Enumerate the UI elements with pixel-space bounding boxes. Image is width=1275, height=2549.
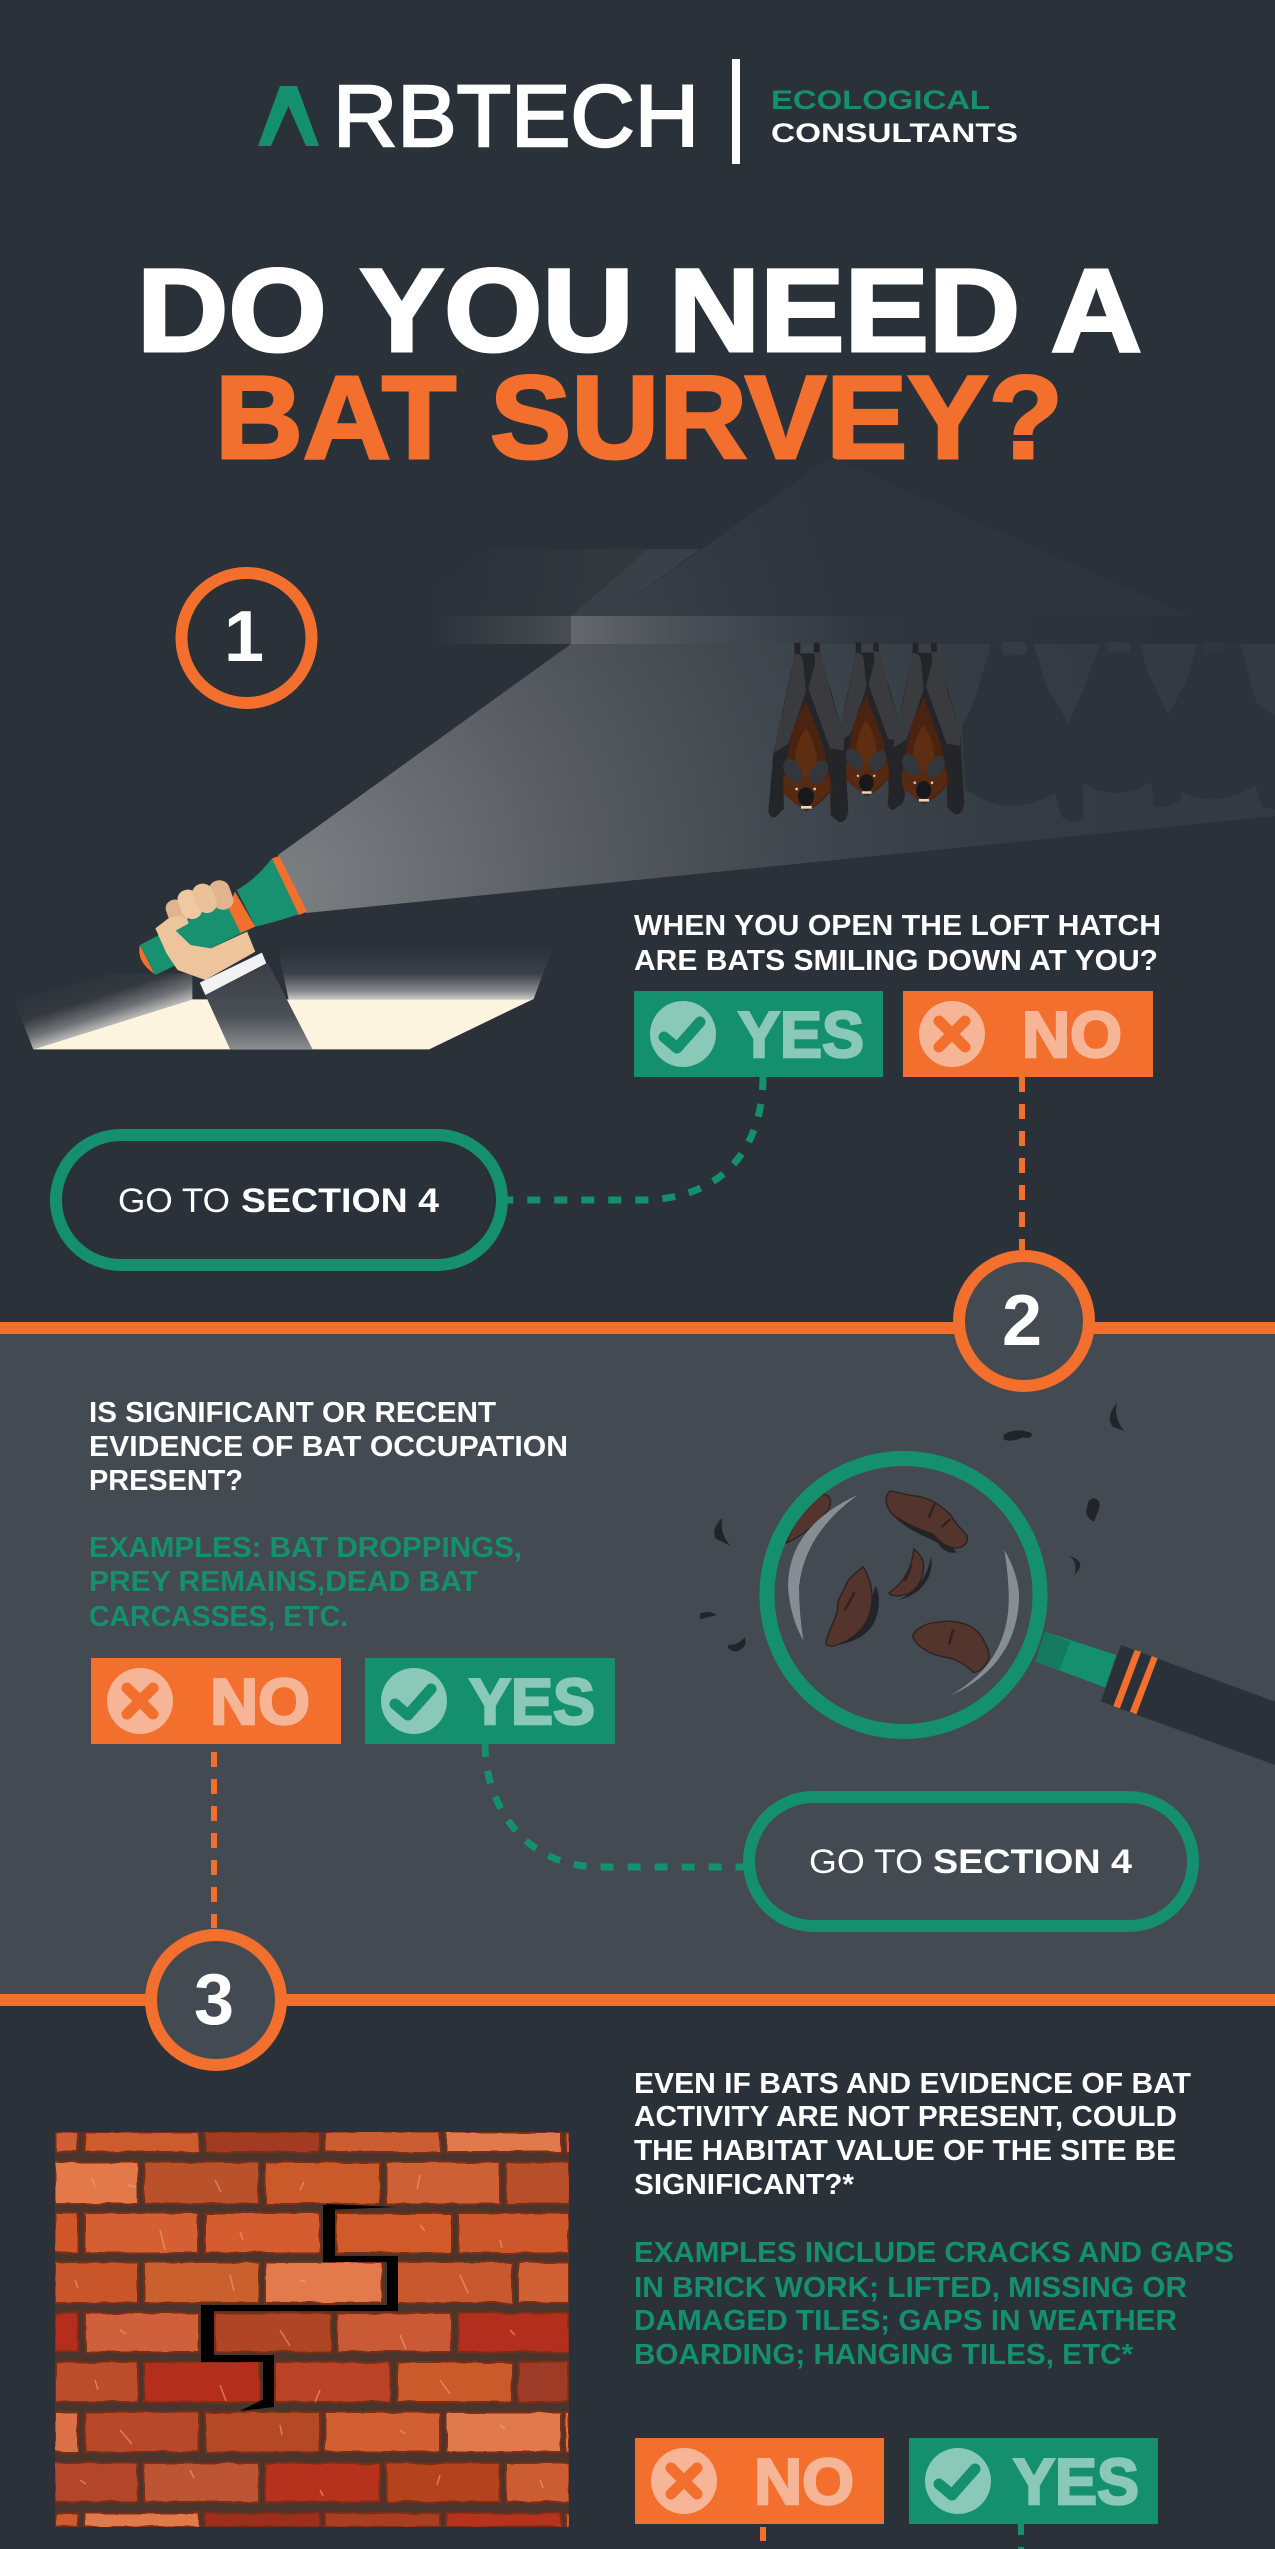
callout: go to section 4 (second) bbox=[749, 1797, 1193, 1926]
callout: go to section 4 (first) bbox=[56, 1135, 502, 1265]
ceiling band left bbox=[428, 616, 571, 644]
button: no (section 1) bbox=[903, 991, 1153, 1077]
step number 1 bbox=[182, 573, 312, 703]
cuff bbox=[200, 953, 266, 995]
orange divider 1 bbox=[0, 1322, 1275, 1334]
callout: go to section 4 (second): SECTION 4 bbox=[933, 1843, 1132, 1881]
examples text section 2: CARCASSES, ETC. bbox=[89, 1601, 348, 1633]
button: yes (section 2): YES bbox=[469, 1665, 595, 1738]
step number 2: 2 bbox=[1002, 1281, 1042, 1361]
question 3: SIGNIFICANT?* bbox=[634, 2169, 855, 2201]
logo tagline: ecological: ECOLOGICAL bbox=[771, 85, 990, 115]
examples text section 2: PREY REMAINS,DEAD BAT bbox=[89, 1566, 478, 1598]
callout: go to section 4 (first): GO TO bbox=[118, 1182, 230, 1220]
flashlight end cap bbox=[139, 945, 155, 974]
scattered droppings bbox=[700, 1403, 1124, 1652]
arrow stub: yes bbox=[1018, 2524, 1024, 2549]
button: yes (section 1): YES bbox=[738, 998, 864, 1071]
callout: go to section 4 (second): GO TO bbox=[809, 1843, 923, 1881]
bat: right bbox=[888, 643, 964, 814]
lens glare left bbox=[788, 1495, 858, 1641]
examples text section 3 bbox=[634, 2237, 1234, 2371]
roof triangle bbox=[608, 457, 1190, 616]
arrow: yes to section 4 bbox=[485, 1744, 745, 1867]
logo tagline: consultants: CONSULTANTS bbox=[771, 118, 1018, 148]
bricks bbox=[55, 2132, 569, 2527]
examples text section 3: DAMAGED TILES; GAPS IN WEATHER bbox=[634, 2305, 1177, 2337]
fingers bbox=[163, 878, 236, 928]
flashlight collar bbox=[229, 892, 255, 933]
callout: go to section 4 (first): SECTION 4 bbox=[241, 1182, 439, 1220]
examples text section 3: IN BRICK WORK; LIFTED, MISSING OR bbox=[634, 2272, 1187, 2304]
torch light beam bbox=[278, 644, 1275, 913]
bat shadows bbox=[962, 642, 1275, 822]
button: yes (section 3): YES bbox=[1013, 2445, 1139, 2518]
question 2 bbox=[89, 1397, 568, 1497]
title line 1: DO YOU NEED A bbox=[137, 245, 1142, 377]
logo: Arbtech Ecological Consultants bbox=[258, 59, 1018, 165]
orange divider 2 bbox=[0, 1994, 1275, 2006]
logo wordmark: RBTECH bbox=[333, 68, 699, 165]
arrow: no to step 3 bbox=[211, 1752, 217, 1928]
button: no (section 3) bbox=[635, 2438, 884, 2524]
sleeve bbox=[205, 963, 313, 1049]
question 3 bbox=[634, 2068, 1191, 2201]
hatch left glow bbox=[14, 973, 192, 1049]
brick flecks bbox=[75, 2175, 543, 2496]
illustration: cracked brick wall bbox=[55, 2132, 569, 2527]
bats hanging from the ceiling bbox=[768, 643, 964, 822]
flashlight barrel bbox=[140, 897, 252, 975]
examples text section 2: EXAMPLES: BAT DROPPINGS, bbox=[89, 1532, 522, 1564]
button: yes (section 3) bbox=[909, 2438, 1158, 2524]
ceiling band right bbox=[571, 616, 1171, 644]
button: no (section 2): NO bbox=[210, 1665, 310, 1738]
loft interior: roof and ceiling beam bbox=[390, 457, 1190, 644]
panel: section 2 background bbox=[0, 1328, 1275, 2000]
question 2: IS SIGNIFICANT OR RECENT bbox=[89, 1397, 496, 1429]
title line 2: BAT SURVEY? bbox=[215, 352, 1063, 484]
roof light strip bbox=[571, 549, 700, 616]
flashlight lens ring bbox=[272, 856, 307, 915]
handle connector bbox=[1036, 1632, 1116, 1687]
lens glare right bbox=[949, 1550, 1019, 1696]
button: yes (section 1) bbox=[634, 991, 883, 1077]
step number 2 bbox=[959, 1256, 1089, 1386]
examples text section 3: EXAMPLES INCLUDE CRACKS AND GAPS bbox=[634, 2237, 1234, 2269]
hatch opening bbox=[33, 999, 533, 1049]
logo divider bbox=[732, 59, 740, 164]
question 3: EVEN IF BATS AND EVIDENCE OF BAT bbox=[634, 2068, 1191, 2100]
handle bbox=[1101, 1645, 1275, 1765]
question 3: ACTIVITY ARE NOT PRESENT, COULD bbox=[634, 2101, 1177, 2133]
question 3: THE HABITAT VALUE OF THE SITE BE bbox=[634, 2135, 1176, 2167]
illustration: magnifying glass over droppings bbox=[700, 1403, 1275, 1765]
flashlight head bbox=[237, 858, 306, 927]
roof dim left face bbox=[390, 549, 648, 616]
question 1: ARE BATS SMILING DOWN AT YOU? bbox=[634, 945, 1158, 977]
hand bbox=[155, 916, 255, 980]
button: yes (section 2) bbox=[365, 1658, 615, 1744]
question 1: WHEN YOU OPEN THE LOFT HATCH bbox=[634, 910, 1161, 942]
arrow stub: no bbox=[760, 2527, 766, 2541]
droppings inside the lens bbox=[786, 1491, 989, 1672]
arrow: no to step 2 bbox=[1019, 1077, 1025, 1250]
handle stripes bbox=[1113, 1650, 1141, 1708]
bat: middle bbox=[832, 643, 905, 806]
hatch right glow bbox=[277, 947, 553, 999]
step number 3: 3 bbox=[194, 1960, 234, 2040]
examples text section 2 bbox=[89, 1532, 522, 1633]
button: no (section 1): NO bbox=[1022, 998, 1122, 1071]
step number 3 bbox=[151, 1935, 281, 2065]
bat: left bbox=[768, 643, 848, 822]
question 2: EVIDENCE OF BAT OCCUPATION bbox=[89, 1431, 568, 1463]
crack bbox=[201, 2204, 398, 2411]
logo mark: green A bbox=[258, 86, 319, 146]
question 2: PRESENT? bbox=[89, 1465, 243, 1497]
magnifying glass ring bbox=[767, 1458, 1040, 1732]
button: no (section 3): NO bbox=[754, 2445, 854, 2518]
title bbox=[137, 245, 1142, 484]
examples text section 3: BOARDING; HANGING TILES, ETC* bbox=[634, 2339, 1134, 2371]
question 1 bbox=[634, 910, 1161, 977]
arrow: yes to section 4 bbox=[508, 1077, 763, 1200]
illustration: hand with torch at loft hatch bbox=[14, 856, 553, 1049]
button: no (section 2) bbox=[91, 1658, 341, 1744]
mortar bbox=[55, 2132, 569, 2527]
step number 1: 1 bbox=[224, 597, 264, 677]
